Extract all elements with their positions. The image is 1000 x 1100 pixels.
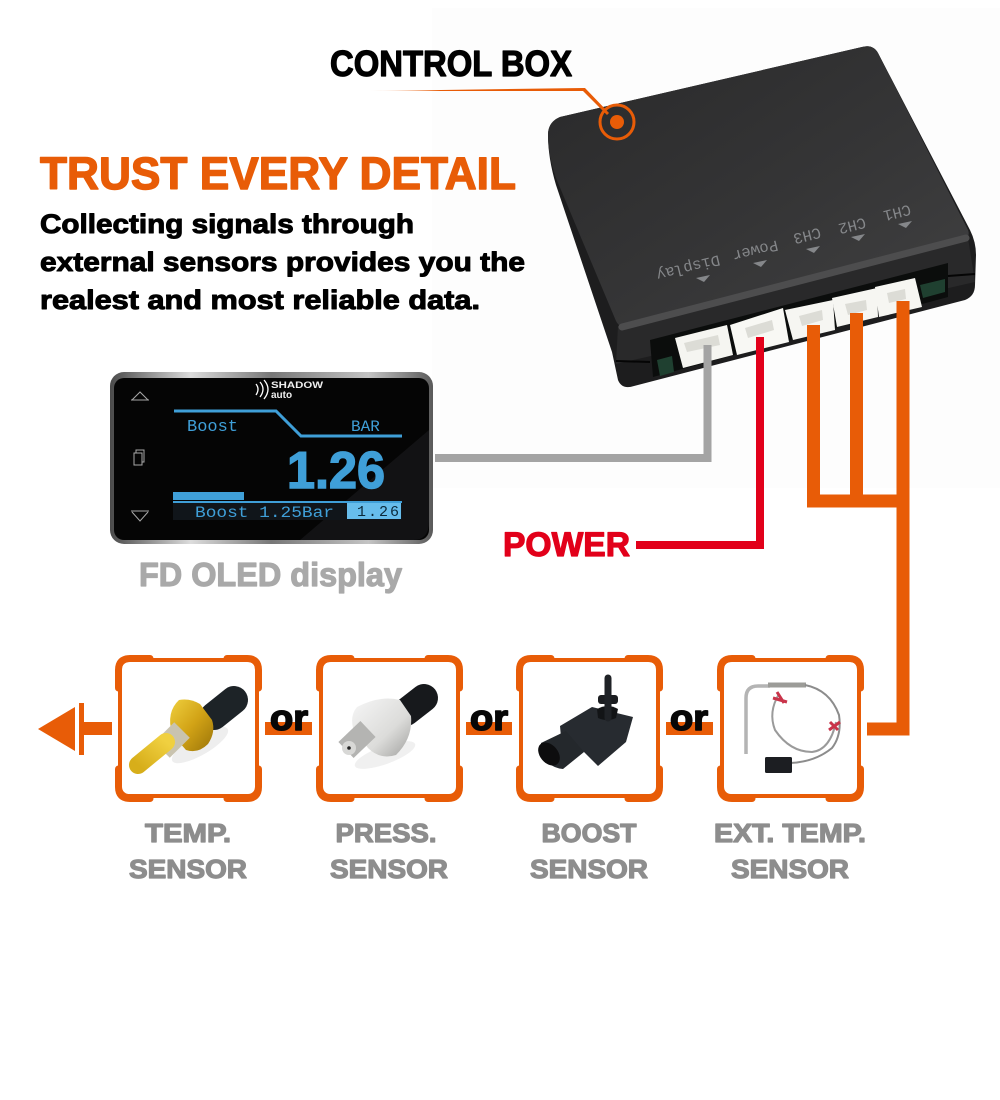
panel: exhaust temperature sensor xyxy=(720,658,860,798)
brand logo: auto xyxy=(271,390,292,401)
brand logo: SHADOW xyxy=(271,380,323,391)
label: ext temp sensor: SENSOR xyxy=(731,854,849,884)
display caption: FD OLED display xyxy=(139,556,403,593)
icon: temperature sensor xyxy=(138,700,234,770)
OLED display xyxy=(110,372,433,544)
orange sensor channel cables xyxy=(807,301,903,729)
boost value: 1.26 xyxy=(287,442,385,500)
panel: pressure sensor xyxy=(320,658,460,798)
connector: CH2 port xyxy=(832,288,878,327)
connector: CH3 port xyxy=(785,300,835,340)
panel: temp sensor xyxy=(118,658,258,798)
label: press sensor: SENSOR xyxy=(330,854,448,884)
title: TRUST EVERY DETAIL xyxy=(40,148,516,199)
port label: CH2: CH2 xyxy=(836,213,868,237)
port label: CH3: CH3 xyxy=(791,223,823,247)
description text: Collecting signals through xyxy=(40,209,414,239)
boost label: Boost xyxy=(187,418,238,437)
icon: boost sensor xyxy=(534,678,633,770)
description text: realest and most reliable data. xyxy=(40,285,480,315)
label: ext temp sensor: EXT. TEMP. xyxy=(714,818,866,848)
output arrow xyxy=(38,703,112,755)
label: temp sensor: SENSOR xyxy=(129,854,247,884)
panel: boost sensor xyxy=(520,658,660,798)
connector with or 1: or xyxy=(270,697,308,738)
icon: exhaust temperature probe xyxy=(746,685,840,773)
label: press sensor: PRESS. xyxy=(336,818,436,848)
brand logo xyxy=(256,380,323,401)
description text xyxy=(40,209,525,315)
unit label: BAR xyxy=(351,418,380,436)
label: boost sensor: SENSOR xyxy=(530,854,648,884)
gray display cable xyxy=(435,345,708,458)
label: boost sensor xyxy=(530,818,648,884)
port label: Display: Display xyxy=(654,250,722,284)
side buttons xyxy=(131,392,149,521)
level bar xyxy=(173,492,244,500)
connector: power port xyxy=(730,308,789,355)
control box leader line and marker xyxy=(368,88,634,139)
control box photo xyxy=(548,46,976,387)
connector: display port xyxy=(675,325,733,368)
power label: POWER xyxy=(503,526,630,564)
connector: CH1 port xyxy=(875,278,922,317)
label: press sensor xyxy=(330,818,448,884)
label: ext temp sensor xyxy=(714,818,866,884)
icon: pressure sensor xyxy=(342,698,424,774)
label: temp sensor xyxy=(129,818,247,884)
port label: CH1: CH1 xyxy=(881,200,913,224)
status readout: Boost 1.25Bar xyxy=(195,504,334,522)
label: boost sensor: BOOST xyxy=(542,818,637,848)
connector with or 2: or xyxy=(470,697,508,738)
highlighted value: 1.26 xyxy=(357,504,399,521)
connector with or 3: or xyxy=(670,697,708,738)
red power cable xyxy=(636,337,760,545)
port label: Power: Power xyxy=(730,236,780,264)
description text: external sensors provides you the xyxy=(40,247,525,277)
control box label: CONTROL BOX xyxy=(330,43,572,84)
label: temp sensor: TEMP. xyxy=(145,818,231,848)
